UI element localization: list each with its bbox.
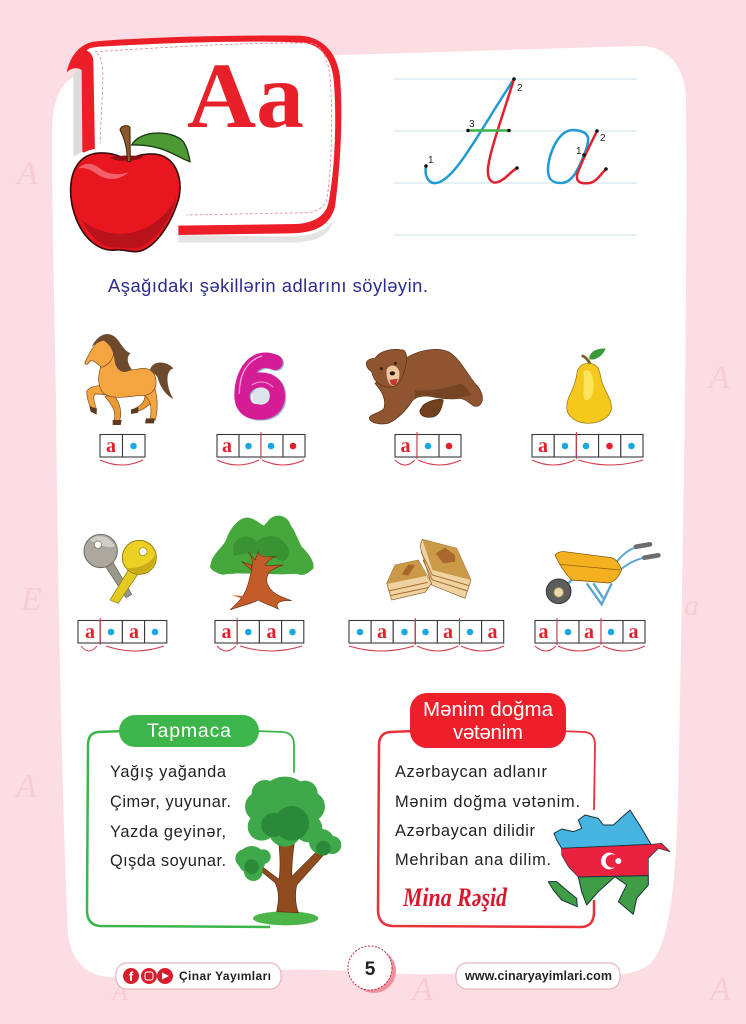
trunk (257, 827, 325, 913)
apple body (71, 153, 180, 252)
panel: poem: Azərbaycan dilidir (395, 822, 536, 840)
icon: number six (239, 356, 279, 413)
panel: poem: Mehriban ana dilim. (395, 851, 551, 869)
grass (253, 911, 318, 925)
uppercase A strokes (426, 79, 514, 183)
icon: wheelbarrow (546, 544, 658, 604)
word scheme: pear: a (538, 435, 548, 457)
word scheme: tree: a (266, 621, 276, 643)
stitched dashes (95, 43, 332, 215)
horse mane (92, 334, 132, 372)
footer: publisher badge: f (129, 969, 134, 984)
panel: riddle: Tapmaca (147, 720, 231, 742)
background watermark letters: A (14, 768, 37, 805)
riddle text: Yağış yağanda (110, 763, 227, 781)
front piece (387, 560, 432, 600)
barrow handles (617, 547, 645, 570)
word scheme: bear (395, 432, 461, 465)
word scheme: wheelbarrow: a (538, 621, 548, 643)
cursive letter guide: 2 (600, 133, 606, 144)
horse head (85, 340, 114, 367)
panel: poem (378, 693, 595, 927)
word scheme: horse: a (106, 435, 116, 457)
heading letters Aa: Aa (187, 45, 304, 148)
panel: poem: Mənim doğma vətənim. (395, 793, 580, 811)
instruction text: Aşağıdakı şəkillərin adlarını söyləyin. (108, 275, 428, 296)
apple leaf (132, 133, 190, 162)
word scheme: bear: a (400, 435, 410, 457)
background watermark letters: A (707, 359, 730, 396)
crescent and star (601, 853, 618, 869)
guide lines (394, 78, 637, 80)
word scheme: wheelbarrow: a (628, 621, 638, 643)
background watermark letters: E (20, 581, 42, 618)
map green band (578, 876, 648, 914)
apple stem (120, 126, 131, 162)
icon: apple (67, 126, 190, 255)
background watermark letters: A (410, 971, 433, 1008)
background watermark letters: A (15, 155, 38, 192)
word scheme: keys (78, 618, 167, 651)
horse tail (150, 362, 173, 399)
walnut top (436, 548, 455, 563)
lowercase a strokes (548, 130, 588, 183)
riddle title pill (119, 715, 259, 747)
barrow wheel (546, 579, 571, 604)
icon: riddle tree (235, 772, 341, 925)
barrow legs (558, 580, 612, 604)
cursive letter guide: 2 (517, 83, 523, 94)
card red back (67, 36, 341, 235)
tree trunk (230, 552, 292, 610)
word scheme: baklava: a (488, 621, 498, 643)
word scheme: tree: a (222, 621, 232, 643)
word scheme: horse (100, 434, 145, 465)
panel: riddle (87, 715, 294, 927)
background watermark letters: a (684, 589, 699, 622)
icon: baklava (387, 539, 471, 600)
horse near legs (87, 385, 157, 420)
word scheme: pear (532, 432, 643, 465)
rear piece (420, 539, 471, 598)
bear body (369, 349, 482, 424)
horse hooves (89, 406, 155, 425)
horse body and neck (99, 353, 156, 397)
word scheme: keys: a (85, 621, 95, 643)
footer: publisher badge (116, 963, 281, 989)
icon: large tree (210, 516, 314, 610)
cursive letter guide (394, 77, 637, 235)
word scheme: wheelbarrow (535, 618, 645, 651)
word scheme: six (217, 432, 305, 465)
footer: website badge: www.cinaryayimlari.com (464, 969, 612, 983)
icon: Azerbaijan flag map (548, 810, 670, 914)
icon: horse (85, 334, 173, 425)
background watermark letters: A (708, 971, 731, 1008)
publisher name: Çinar Yayımları (179, 969, 271, 983)
cursive letter guide: 3 (469, 119, 475, 130)
background watermark letters: A (110, 977, 128, 1006)
yellow key (110, 570, 138, 603)
footer: page number: 5 (365, 959, 376, 980)
icon: keys (84, 534, 156, 603)
word scheme: keys: a (129, 621, 139, 643)
word scheme: baklava: a (443, 621, 453, 643)
panel: riddle: Yazda geyinər, (110, 823, 226, 841)
horse far legs (105, 393, 153, 422)
poem frame (378, 731, 594, 927)
card white face (87, 42, 335, 226)
word scheme: six: a (222, 435, 232, 457)
bear far leg (420, 399, 443, 417)
poem author signature: Mina Rəşid (402, 883, 508, 912)
bear head (366, 349, 407, 387)
bear muzzle (386, 366, 399, 386)
word scheme: wheelbarrow: a (584, 621, 594, 643)
foliage (235, 777, 341, 881)
footer: page number (348, 946, 396, 993)
cursive letter guide: 1 (576, 146, 582, 157)
panel: riddle: Qışda soyunar. (110, 852, 226, 870)
grey key (103, 560, 132, 598)
halo (243, 772, 327, 855)
cursive letter guide: 1 (428, 155, 434, 166)
footer: website badge (456, 963, 620, 989)
icon: bear (366, 349, 482, 424)
word scheme: baklava (349, 618, 504, 651)
barrow tray (555, 552, 622, 583)
poem title pill (410, 693, 566, 748)
panel: poem: Mənim doğma (423, 698, 554, 721)
card shadow (178, 220, 333, 243)
icon: pear (567, 348, 612, 423)
riddle frame (87, 731, 270, 927)
tree crown (210, 516, 314, 575)
panel: riddle: Çimər, yuyunar. (110, 793, 231, 811)
word scheme: tree (215, 618, 304, 651)
word scheme: baklava: a (377, 621, 387, 643)
poem text: Azərbaycan adlanır (395, 763, 548, 781)
map blue band (554, 810, 651, 848)
map red band (562, 843, 670, 877)
panel: poem: vətənim (453, 721, 523, 744)
header card with letter Aa (67, 36, 341, 243)
social icons (123, 968, 139, 984)
white page panel (52, 46, 686, 977)
